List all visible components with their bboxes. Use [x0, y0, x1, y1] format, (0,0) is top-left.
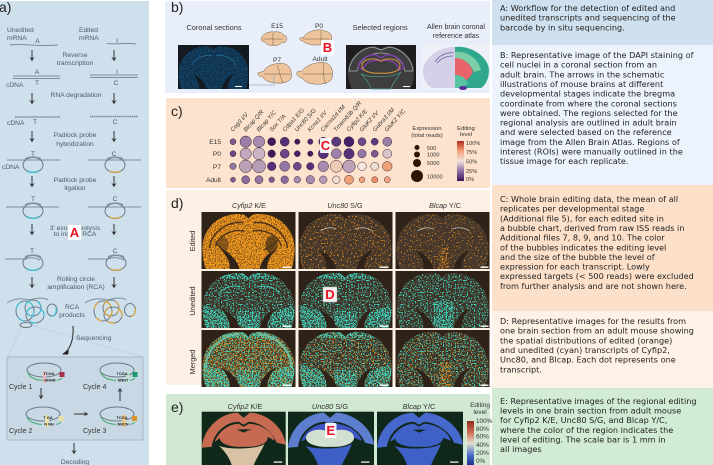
RCA product: cyan	[7, 298, 57, 328]
caption B: interest (ROIs) were manually outlined in the	[500, 146, 683, 156]
legend: expression: 10000	[427, 174, 443, 180]
image: Cyfip2 merged	[202, 330, 296, 387]
arrows: padlock hybridization: Padlock probe	[54, 132, 97, 139]
legend: editing level: 60%	[476, 434, 489, 440]
legend: editing level	[467, 402, 493, 465]
coronal sections image	[178, 23, 249, 89]
gene labels	[230, 100, 408, 133]
row: cDNA: cDNA	[7, 120, 25, 127]
Allen atlas image: Allen brain coronal	[427, 24, 485, 31]
cycle 2: T GA	[43, 415, 53, 420]
image: Unc80 merged	[298, 330, 392, 387]
arrows: padlock hybridization	[29, 131, 117, 148]
map: Unc80	[288, 412, 374, 465]
cycle 1: Cycle 1	[9, 384, 32, 391]
image: Cyfip2 edited	[202, 212, 296, 269]
panel: c bubble chart	[166, 98, 490, 188]
caption B: illustrations of mouse brains at different	[500, 79, 663, 89]
cycle 1	[9, 363, 64, 391]
heading e: e)	[171, 399, 183, 415]
column titles: Cyfip2 K/E	[228, 402, 263, 411]
mouse brain P7	[258, 57, 291, 83]
row: cDNA hybrid	[6, 69, 138, 89]
cycle 2: Cycle 2	[9, 428, 32, 435]
legend: editing level: 0%	[476, 458, 486, 465]
row: padlock hybridization: cDNA	[2, 164, 20, 171]
legend: expression: 500	[427, 146, 436, 152]
bubble rows	[230, 136, 392, 184]
heading c: c)	[171, 103, 183, 119]
badge D	[323, 287, 337, 302]
column titles: Blcap Y/C	[403, 402, 436, 411]
panel: workflow a	[0, 0, 149, 465]
badge B: B	[323, 40, 332, 55]
row titles: Edited	[188, 231, 197, 251]
arrows: padlock ligation: Padlock probe	[54, 177, 97, 184]
cycle 4	[83, 363, 138, 391]
row: padlock ligated: T	[31, 196, 35, 203]
legend: expression: (total reads)	[411, 133, 443, 139]
row: cDNA: T	[33, 119, 37, 126]
caption A: barcode by in situ sequencing.	[500, 22, 625, 32]
image: Blcap edited	[396, 212, 490, 269]
map: Cyfip2	[202, 412, 286, 465]
row: mRNA	[7, 27, 136, 46]
legend: expression: Expression	[412, 126, 442, 132]
label: RCA products: RCA	[65, 304, 80, 311]
caption A	[492, 0, 713, 45]
arrows: padlock ligation: ligation	[64, 185, 86, 192]
caption B: developmental stages indicate the bregma	[500, 89, 675, 99]
caption C: expressed targets (< 500 reads) were excluded	[500, 271, 694, 281]
arrows between cycles	[38, 388, 122, 416]
legend: editing level: 100%	[476, 418, 493, 425]
caption B: adult brain. The arrows in the schematic	[500, 69, 664, 79]
gene labels: Unc80 S/G	[294, 108, 318, 133]
arrows: rolling circle amplification: Rolling circle	[57, 276, 95, 283]
coronal sections image: Coronal sections	[186, 23, 242, 32]
cycle 4: NNNT	[118, 378, 129, 382]
badge C: C	[321, 138, 331, 153]
row: cDNA: C	[113, 119, 118, 126]
panel: b brain regions	[165, 0, 490, 93]
caption B: coordinate from where the coronal sections	[500, 98, 677, 108]
arrow: sequencing: Sequencing	[76, 335, 112, 342]
legend: editing level: 25%	[466, 169, 477, 175]
caption C: expression for each transcript. Lowly	[500, 262, 650, 272]
caption C: Additional files 7, 8, 9, and 10. The color	[500, 233, 665, 243]
caption E: for Cyfip2 K/E, Unc80 S/G, and Blcap Y/C,	[500, 415, 667, 425]
legend: expression: 1000	[427, 152, 439, 158]
row: cDNA hybrid: C	[114, 80, 119, 87]
box: sequencing cycles	[7, 357, 143, 440]
caption C: of the bubbles indicates the editing level	[500, 242, 666, 252]
caption B: cell nuclei in a coronal section from an	[500, 60, 657, 70]
caption B: B: Representative image of the DAPI staining of	[500, 50, 695, 60]
legend: expression: 5000	[427, 161, 439, 167]
caption D	[492, 311, 713, 388]
cycle 3: Cycle 3	[83, 428, 106, 435]
caption A: A: Workflow for the detection of edited and	[500, 3, 675, 13]
caption E: where the color of the region indicates the	[500, 425, 673, 435]
caption B: were obtained. The regions selected for the	[500, 108, 678, 118]
column titles	[232, 201, 461, 210]
cycle 4: Cycle 4	[83, 384, 106, 391]
image: Blcap merged	[396, 330, 490, 387]
row: after exonucleolysis: C	[113, 248, 118, 255]
cycle 2: N NH	[44, 422, 54, 426]
image: Blcap unedited	[396, 271, 490, 328]
badge D: D	[325, 287, 335, 302]
row: padlock ligated	[6, 196, 141, 218]
gene labels: Kcna1 I/V	[307, 110, 329, 133]
stage labels	[206, 139, 221, 184]
column titles: Unc80 S/G	[312, 402, 348, 411]
selected regions image	[346, 23, 416, 89]
row: padlock hybridization	[2, 151, 141, 172]
badge A: A	[70, 225, 80, 240]
cycle 1: NNNN	[44, 378, 56, 382]
mouse brain E15	[261, 23, 286, 46]
caption C: a bubble chart, derived from raw ISS reads in	[500, 223, 684, 233]
arrows: rolling circle amplification: amplification (RCA)	[47, 284, 105, 291]
arrows: exonucleolysis: to initiate RCA	[54, 231, 97, 238]
image: Cyfip2 unedited	[202, 271, 296, 328]
row: mRNA: A	[35, 38, 40, 45]
Allen atlas image	[422, 24, 490, 90]
mouse brain P0	[300, 23, 332, 45]
cycle 3: TCGA	[116, 415, 128, 420]
cycle 4: TCGA	[116, 371, 128, 376]
label: RCA products: products	[59, 312, 85, 319]
column titles: Unc80 S/G	[327, 201, 363, 210]
arrows: exonucleolysis	[29, 224, 117, 238]
map: Blcap	[377, 412, 463, 465]
row: mRNA: mRNA	[79, 35, 99, 42]
row titles: Merged	[188, 350, 197, 374]
row: padlock hybridization: C	[112, 151, 117, 158]
mouse brain E15: E15	[271, 23, 283, 30]
row: cDNA	[7, 116, 138, 127]
gene labels: Cdpa1 E/G	[282, 107, 306, 133]
legend: editing level: Editing	[470, 402, 490, 409]
gene labels: Cyfip2 K/E	[346, 109, 369, 133]
column titles	[228, 402, 436, 411]
row: padlock hybridization: T	[31, 151, 35, 158]
caption D: D: Representative images for the results from	[500, 316, 686, 326]
arrows: reverse transcription: Reverse	[63, 52, 88, 59]
caption C: C: Whole brain editing data, the mean of all	[500, 194, 678, 204]
arrows: reverse transcription	[29, 50, 117, 67]
stage labels: P7	[213, 164, 221, 171]
gene labels: Blcap Q/R	[243, 109, 266, 133]
arrows: reverse transcription: transcription	[57, 60, 93, 67]
caption D: the spatial distributions of edited (orange)	[500, 335, 672, 345]
caption C: replicates per developmental stage	[500, 204, 644, 214]
arrows: exonucleolysis: 3' exonucleolysis	[50, 225, 101, 232]
legend: editing level: 20%	[476, 450, 489, 457]
arrows: RNA degradation	[29, 92, 117, 104]
badge E: E	[326, 423, 335, 438]
caption D: transcript.	[500, 364, 542, 374]
caption D: and unedited (cyan) transcripts of Cyfip2,	[500, 345, 670, 355]
arrows: padlock hybridization: hybridization	[56, 141, 94, 148]
legend: editing level: 50%	[466, 160, 477, 166]
gene labels: Cacna1d I/M	[320, 104, 347, 133]
mouse brain P7: P7	[273, 57, 281, 64]
row: mRNA: Unedited	[7, 27, 34, 34]
row titles: Unedited	[188, 286, 197, 316]
cycle 2	[9, 407, 64, 435]
row: after exonucleolysis	[5, 248, 126, 270]
heading d: d)	[171, 195, 183, 211]
legend: editing level: 80%	[476, 426, 489, 433]
row titles	[188, 231, 197, 374]
image: Unc80 unedited	[298, 271, 392, 328]
row: mRNA: mRNA	[7, 35, 27, 42]
caption B: and were selected based on the reference	[500, 127, 672, 137]
Allen atlas image: reference atlas	[433, 33, 480, 40]
row: padlock ligated: C	[113, 196, 118, 203]
legend: expression	[411, 126, 443, 182]
gene labels: Gabra3 I/M	[372, 107, 396, 133]
caption B: tissue image for each replicate.	[500, 156, 629, 166]
caption C	[492, 185, 713, 311]
gene labels: GluK2 I/V	[359, 110, 381, 133]
legend: editing level: 0%	[466, 177, 474, 183]
cycle 3	[83, 407, 137, 435]
arrow: sequencing	[62, 326, 112, 354]
label: RCA products	[59, 304, 85, 319]
cycle 1: TCGA	[43, 371, 55, 376]
legend: editing level: Editing	[457, 126, 475, 132]
caption B: image from the Allen Brain Atlas. Regions of	[500, 137, 681, 147]
row: mRNA: I	[116, 38, 118, 45]
cycle 3: NNCN	[117, 422, 129, 426]
arrows: RNA degradation: RNA degradation	[51, 92, 102, 99]
legend: editing level: 40%	[476, 442, 489, 449]
stage labels: E15	[209, 139, 221, 146]
mouse brain adult: Adult	[312, 56, 328, 63]
connector from section to brain	[249, 75, 274, 85]
legend: editing level	[457, 126, 480, 183]
RCA product: orange	[85, 298, 136, 323]
caption E: all images	[500, 444, 542, 454]
row: after exonucleolysis: T	[30, 248, 34, 255]
caption C: from further analysis and are not shown here.	[500, 281, 687, 291]
caption D: Unc80, and Blcap. Each dot represents one	[500, 355, 676, 365]
caption B: regional analysis are outlined in adult brain	[500, 118, 677, 128]
column titles: Cyfip2 K/E	[232, 201, 266, 210]
legend: editing level: 100%	[466, 141, 480, 147]
gene labels: Cog3 I/V	[230, 111, 251, 133]
gene labels: Tmem63b Q/R	[333, 100, 364, 133]
row: mRNA: Edited	[79, 27, 98, 34]
row: cDNA hybrid: T	[35, 80, 39, 87]
legend: editing level: level	[473, 409, 487, 416]
caption E: level of editing. The scale bar is 1 mm in	[500, 434, 666, 444]
legend: editing level: level	[460, 132, 472, 138]
caption B	[492, 45, 713, 185]
caption D: one brain section from an adult mouse showing	[500, 326, 694, 336]
caption C: (Additional file 5), for each edited site in	[500, 213, 664, 223]
row: cDNA hybrid: I	[116, 69, 118, 76]
caption E: levels in one brain section from adult mouse	[500, 406, 681, 416]
legend: editing level: 75%	[466, 150, 477, 156]
stage labels: P0	[213, 151, 221, 158]
caption E	[492, 388, 713, 465]
arrow: decoding	[61, 443, 89, 465]
caption C: and the size of the bubble the level of	[500, 252, 656, 262]
panel: d spatial distribution	[166, 190, 490, 387]
mouse brain P0: P0	[315, 23, 323, 30]
column titles: Blcap Y/C	[429, 201, 461, 210]
arrows: padlock ligation	[29, 176, 117, 192]
mouse brain adult	[297, 56, 333, 84]
image: Unc80 edited	[298, 212, 392, 269]
gene labels: Sox T/A	[269, 114, 288, 133]
panel: e regional editing	[166, 394, 493, 465]
gene labels: GluK2 Y/C	[384, 108, 408, 133]
caption E: E: Representative images of the regional editing	[500, 396, 697, 406]
row: cDNA hybrid: cDNA	[6, 82, 24, 89]
gene labels: Blcap Y/C	[256, 109, 278, 133]
stage labels: Adult	[206, 177, 221, 184]
selected regions image: Selected regions	[352, 23, 408, 32]
caption A: unedited transcripts and sequencing of the	[500, 13, 676, 23]
arrows: rolling circle amplification	[29, 276, 117, 291]
row: cDNA hybrid: A	[35, 69, 40, 76]
